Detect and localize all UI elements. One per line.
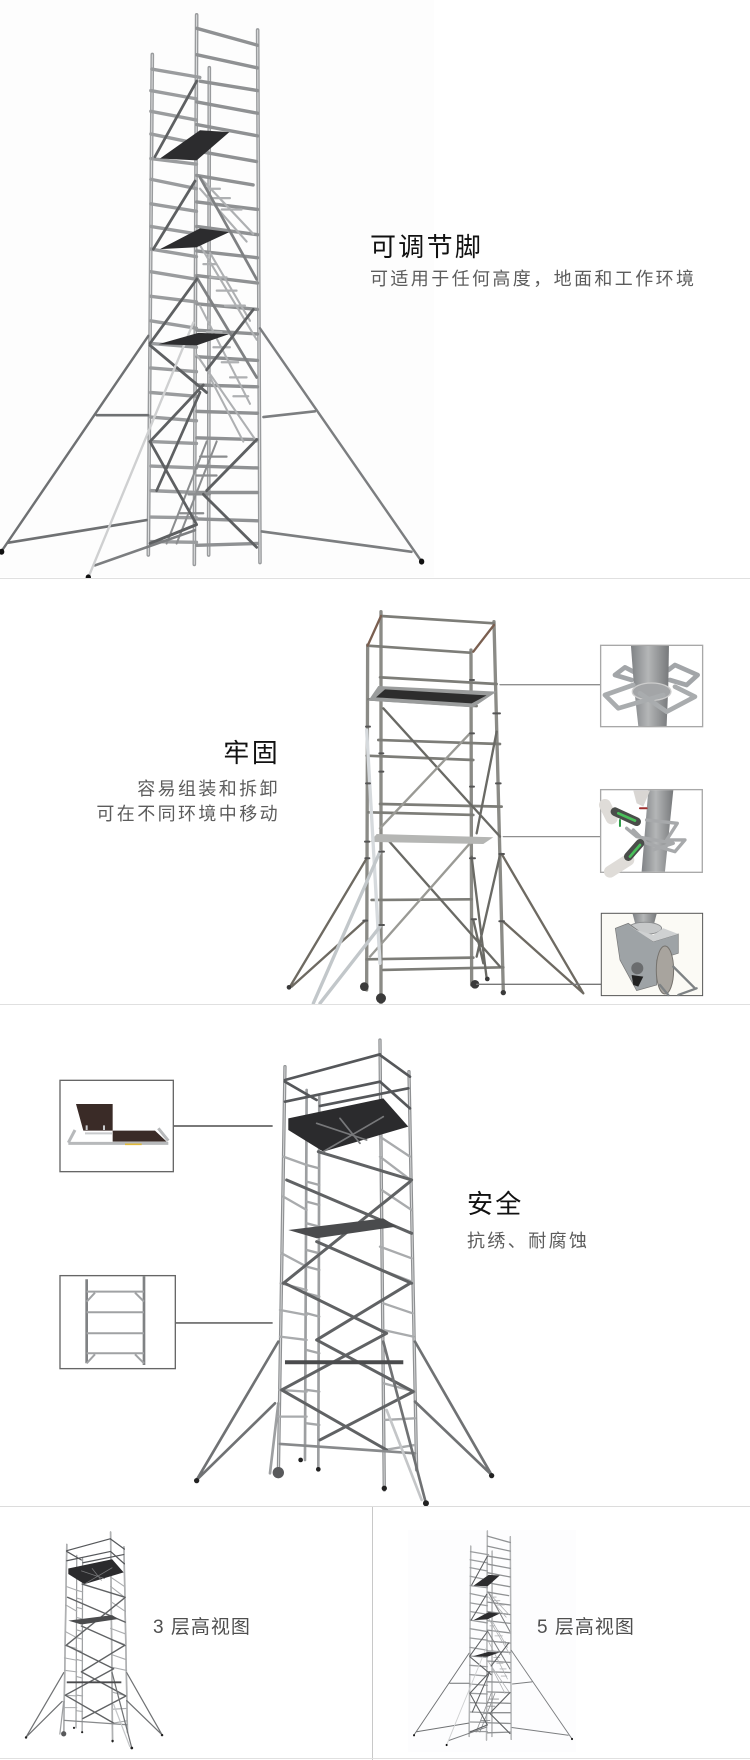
text: sturdy description: 可在不同环境中移动 bbox=[96, 804, 280, 824]
inset photo: ring clamp bbox=[601, 645, 703, 727]
panel: sturdy bbox=[96, 610, 704, 1004]
scaffold tower with callouts and detail photos bbox=[287, 612, 703, 1003]
inset photo: hatch platform bbox=[60, 1080, 173, 1172]
text: sturdy description bbox=[96, 779, 280, 824]
callout line: top clamp bbox=[500, 683, 601, 687]
callout line: mid clamp bbox=[503, 835, 601, 839]
inset photo: clamp being fitted bbox=[601, 790, 702, 872]
heading: adjustable feet: 可调节脚 bbox=[370, 232, 483, 262]
heading: safety: 安全 bbox=[467, 1189, 524, 1219]
tower: three-deck with ladder bbox=[194, 1040, 494, 1506]
callout line: castor bbox=[477, 982, 601, 986]
panel: safety bbox=[59, 1038, 589, 1506]
callout line: platform bbox=[173, 1123, 273, 1128]
scaffold tower with callouts and detail photos bbox=[60, 1040, 494, 1506]
callout line: ladder frame bbox=[175, 1320, 273, 1325]
scaffold tower: five-level with outriggers bbox=[0, 15, 424, 580]
label: five-level view: 5 层高视图 bbox=[537, 1617, 635, 1638]
panel: three-level view bbox=[24, 1531, 251, 1750]
small tower: five-level bbox=[413, 1531, 573, 1746]
inset photo: ladder frame bbox=[60, 1276, 175, 1369]
text: sturdy description: 容易组装和拆卸 bbox=[137, 779, 280, 799]
heading: sturdy: 牢固 bbox=[223, 738, 280, 768]
text: safety description: 抗绣、耐腐蚀 bbox=[467, 1231, 589, 1251]
inset photo: castor wheel bbox=[601, 913, 703, 996]
tower: two-deck frame bbox=[287, 612, 583, 1003]
panel: five-level view bbox=[413, 1530, 635, 1746]
small tower: three-level bbox=[25, 1532, 163, 1749]
label: three-level view: 3 层高视图 bbox=[153, 1617, 251, 1638]
text: adjustable feet description: 可适用于任何高度，地面和工作环境 bbox=[370, 269, 696, 289]
panel: adjustable feet bbox=[0, 13, 750, 579]
